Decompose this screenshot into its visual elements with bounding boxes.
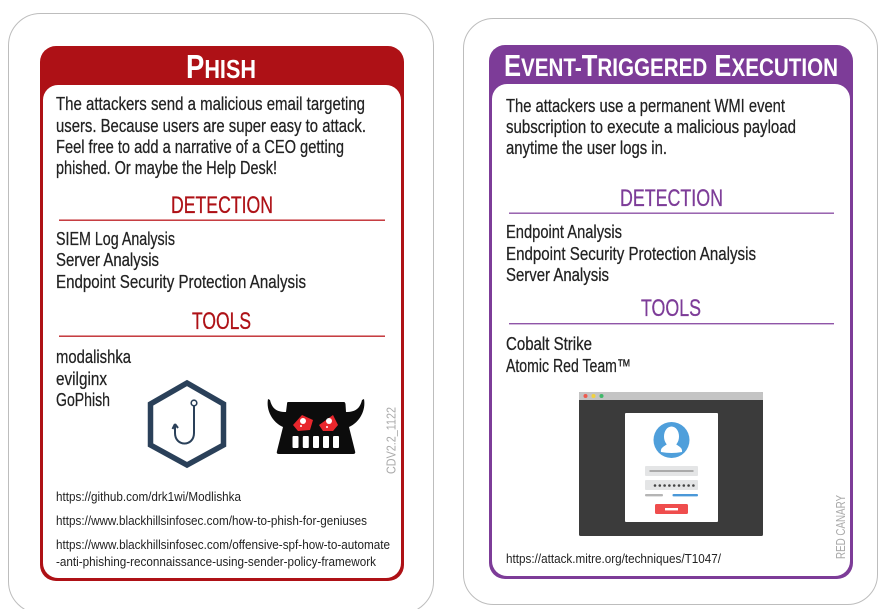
detection list: Endpoint Security Protection Analysis [56, 271, 306, 292]
detection list [56, 228, 306, 292]
tools list [56, 346, 132, 410]
card outline [464, 18, 878, 604]
title: PHISH [186, 48, 256, 85]
title: EVENT-TRIGGERED EXECUTION [504, 48, 838, 83]
reference links: https://github.com/drk1wi/Modlishka [56, 490, 241, 504]
description: Feel free to add a narrative of a CEO getting [56, 136, 344, 157]
card outline [8, 14, 434, 609]
vendor label: RED CANARY [834, 494, 848, 559]
avatar [654, 422, 690, 458]
description: subscription to execute a malicious payload [506, 116, 796, 137]
icon: fish hook hexagon [150, 383, 224, 465]
tools list: Cobalt Strike [506, 333, 592, 354]
reference link: https://attack.mitre.org/techniques/T1047/ [506, 552, 721, 566]
detection list: SIEM Log Analysis [56, 228, 175, 249]
panel body [43, 85, 401, 578]
description: users. Because users are super easy to attack. [56, 115, 366, 136]
detection list [506, 221, 756, 285]
panel frame [40, 46, 404, 581]
description [506, 95, 796, 158]
reference links: https://www.blackhillsinfosec.com/offensive-spf-how-to-automate [56, 538, 390, 552]
heading: tools: TOOLS [641, 295, 701, 322]
reference links [56, 490, 390, 569]
card: Event-Triggered Execution [464, 18, 878, 604]
login form [625, 413, 718, 522]
tools list: evilginx [56, 368, 108, 389]
version label: CDV2.2_1122 [384, 407, 398, 474]
detection list: Endpoint Security Protection Analysis [506, 243, 756, 264]
panel body [492, 84, 850, 576]
reference links: -anti-phishing-reconnaissance-using-sender-policy-framework [56, 555, 377, 569]
tools list: GoPhish [56, 389, 110, 410]
tools list [506, 333, 631, 376]
reference links: https://www.blackhillsinfosec.com/how-to-phish-for-geniuses [56, 514, 367, 528]
password field [645, 480, 698, 490]
description: anytime the user logs in. [506, 137, 667, 158]
tools list: modalishka [56, 346, 132, 367]
panel frame [489, 45, 853, 579]
card: Phish [8, 14, 434, 609]
heading: tools: TOOLS [192, 308, 251, 335]
monster teeth [292, 436, 339, 448]
login button [655, 504, 688, 514]
illustration: login window [579, 392, 763, 536]
heading: detection: DETECTION [620, 185, 723, 212]
username field [645, 466, 698, 476]
icon: horned monster [268, 399, 364, 454]
detection list: Server Analysis [56, 249, 159, 270]
tools list: Atomic Red Team™ [506, 355, 631, 376]
monster eyes [293, 415, 338, 431]
detection list: Endpoint Analysis [506, 221, 622, 242]
detection list: Server Analysis [506, 264, 609, 285]
description: The attackers send a malicious email targeting [56, 93, 365, 114]
heading: detection: DETECTION [171, 192, 273, 219]
description [56, 93, 366, 178]
description: phished. Or maybe the Help Desk! [56, 157, 277, 178]
description: The attackers use a permanent WMI event [506, 95, 785, 116]
